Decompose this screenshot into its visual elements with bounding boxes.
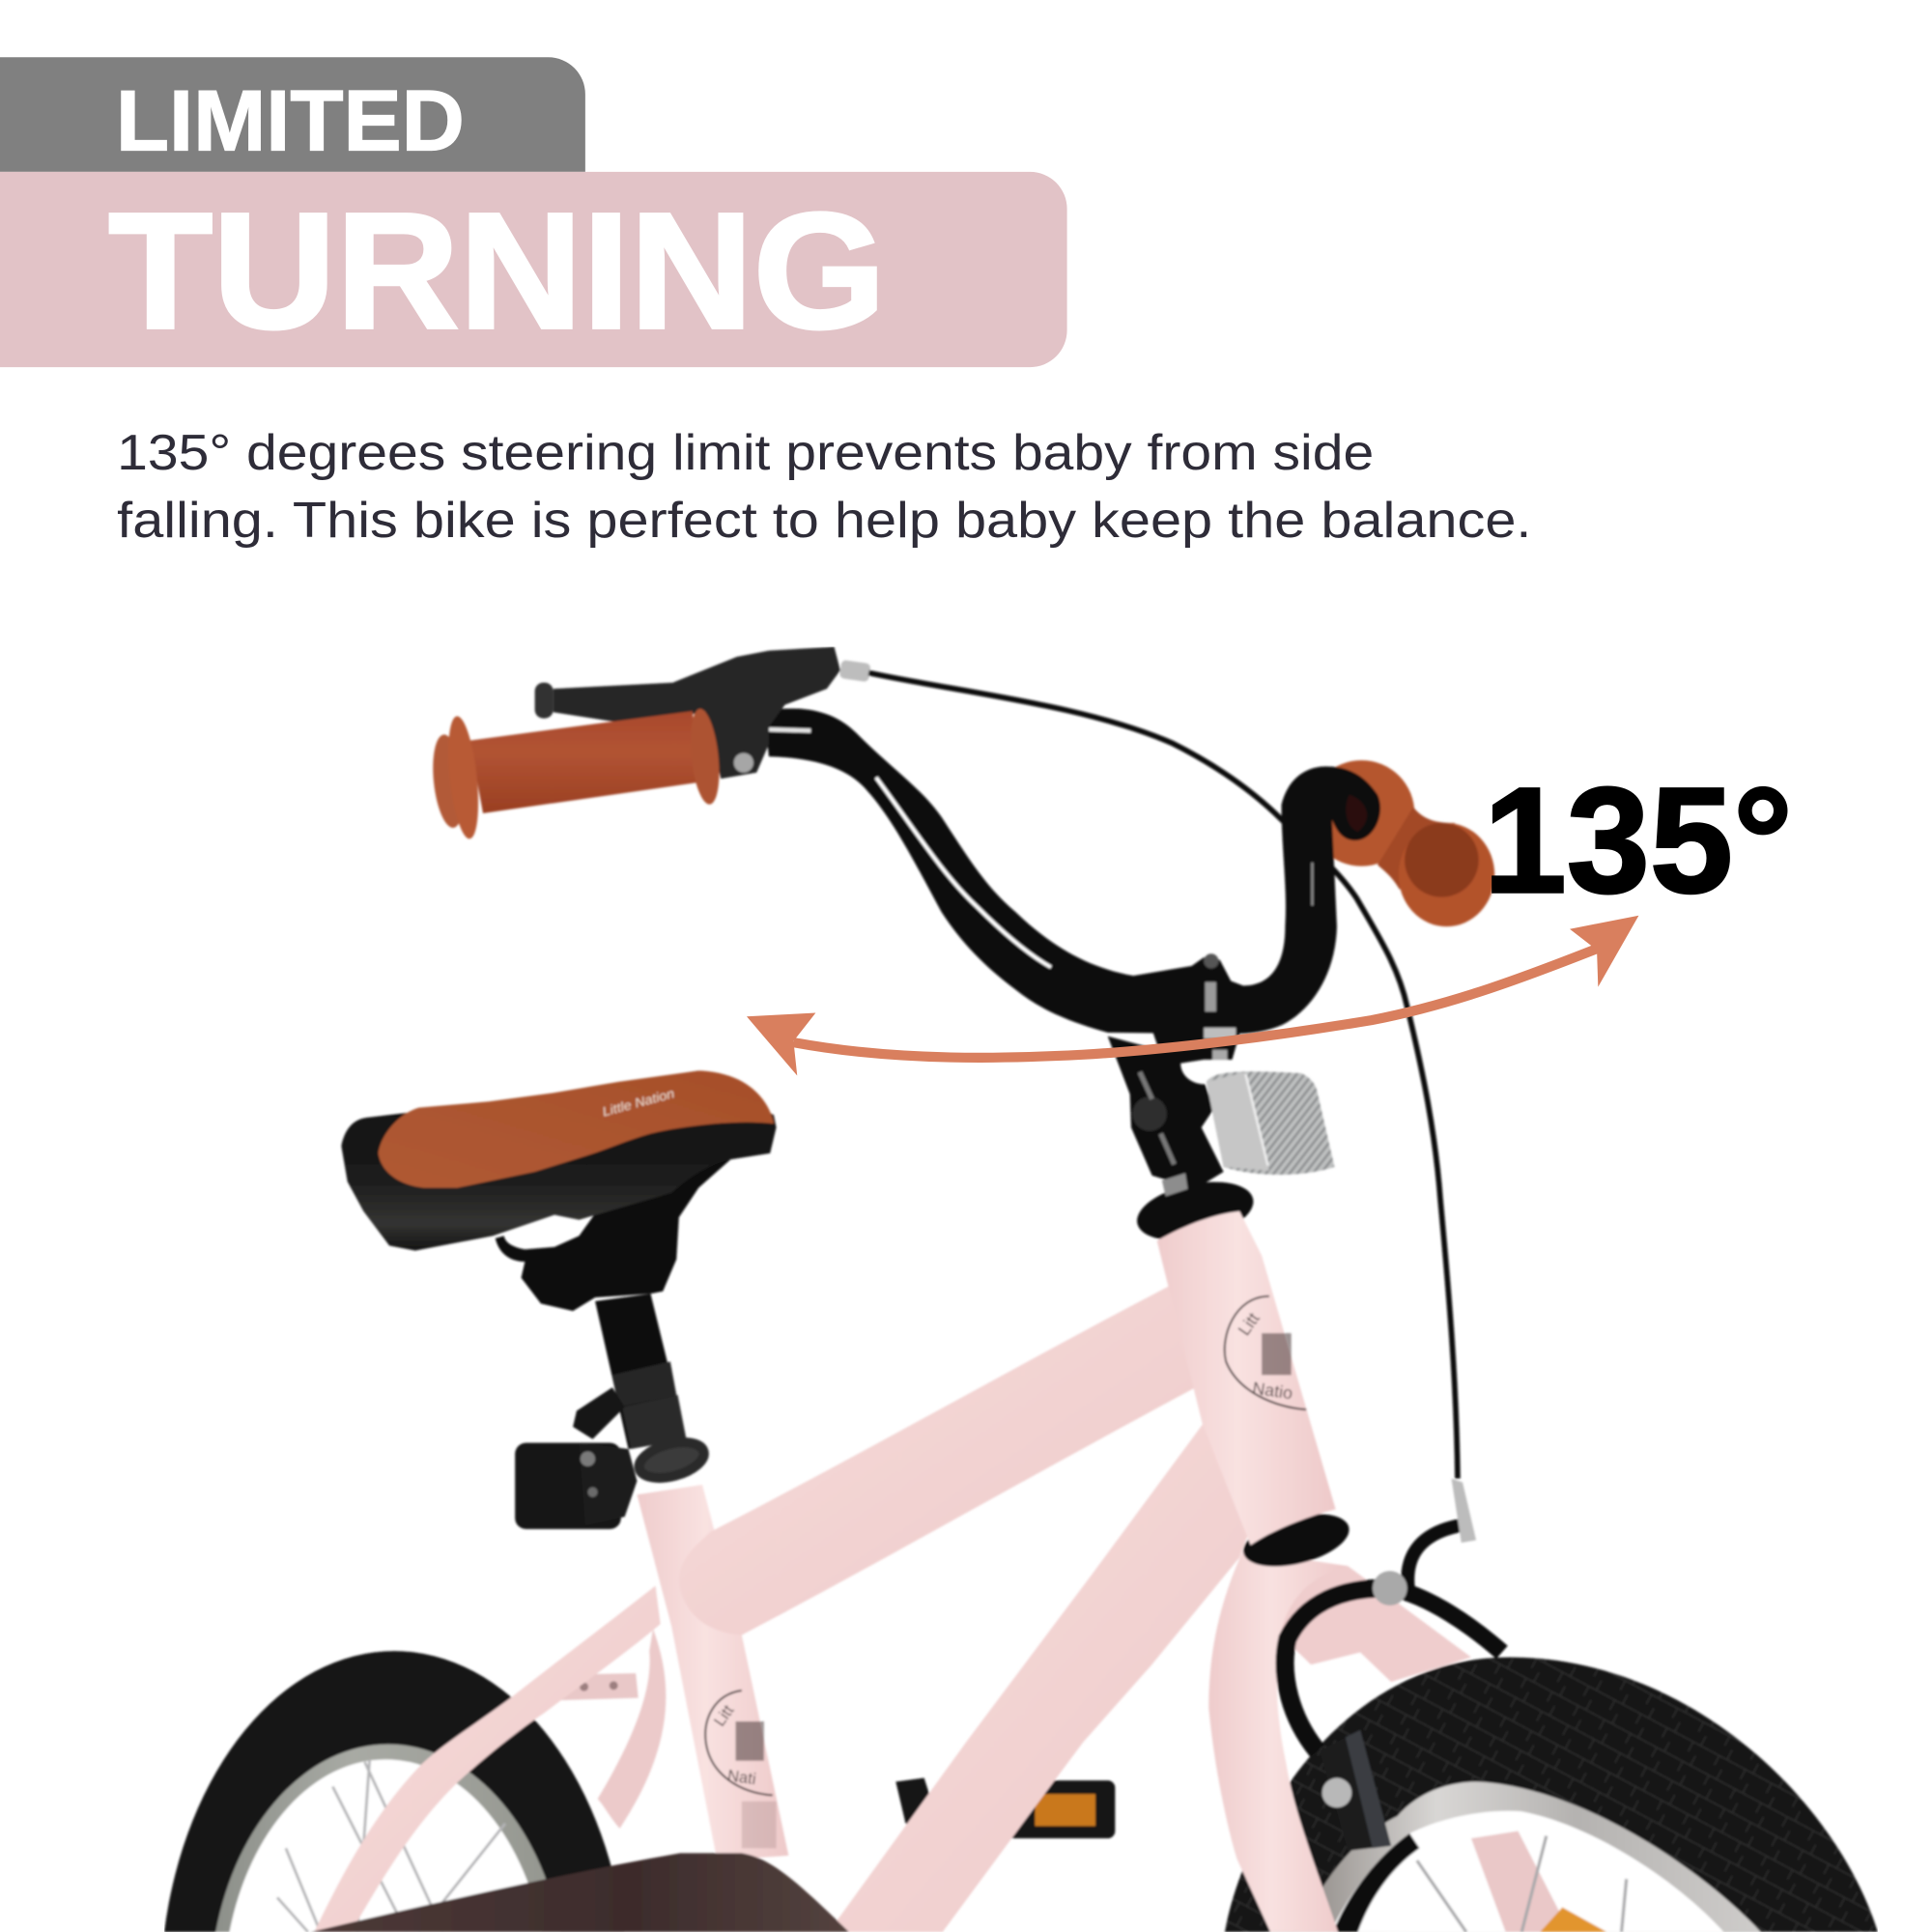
seat stay tube bbox=[314, 1586, 661, 1932]
seat tube bbox=[637, 1485, 788, 1861]
angle label: 135° bbox=[1484, 755, 1793, 923]
heading tab: limited: LIMITED bbox=[116, 72, 465, 169]
seat clamp bbox=[496, 1159, 730, 1311]
saddle bbox=[341, 1070, 777, 1251]
seat tube logo bbox=[705, 1690, 777, 1848]
seat tube logo: Nati bbox=[726, 1766, 757, 1788]
left grip bbox=[429, 707, 724, 840]
rear reflector block bbox=[515, 1436, 708, 1529]
heading tab: turning: TURNING bbox=[108, 179, 886, 363]
heading tab: turning bbox=[0, 172, 1067, 367]
rear wheel bbox=[164, 1651, 624, 1932]
heading tab: limited bbox=[0, 57, 585, 172]
description text: falling. This bike is perfect to help baby keep the balance. bbox=[117, 493, 1531, 549]
brake lever bbox=[535, 647, 871, 779]
head tube logo: Litt bbox=[1235, 1309, 1264, 1339]
right grip bbox=[1309, 760, 1494, 926]
stem and clamp bbox=[1108, 953, 1239, 1197]
description text: 135° degrees steering limit prevents baby from side bbox=[117, 425, 1374, 481]
lower headset ring bbox=[1238, 1504, 1354, 1576]
bicycle photo illustration bbox=[164, 647, 1878, 1932]
seat tube logo: Litt bbox=[710, 1701, 738, 1730]
fork crown and right leg bbox=[1274, 1557, 1471, 1682]
description text bbox=[117, 425, 1531, 549]
seat post bbox=[573, 1293, 686, 1449]
pedal bbox=[895, 1778, 1115, 1838]
head tube bbox=[1157, 1211, 1336, 1545]
down tube bbox=[828, 1424, 1269, 1932]
head tube logo: Natio bbox=[1251, 1378, 1293, 1403]
handlebar bbox=[764, 708, 1380, 1034]
saddle: Little Nation bbox=[601, 1086, 676, 1120]
left fork leg bbox=[1208, 1550, 1348, 1932]
brake cable bbox=[868, 672, 1458, 1479]
rear stay and bracket bbox=[554, 1629, 666, 1829]
upper headset ring bbox=[1132, 1173, 1259, 1250]
chain guard bbox=[310, 1853, 849, 1932]
head tube logo bbox=[1225, 1296, 1306, 1409]
top tube bbox=[679, 1279, 1205, 1635]
front reflector bbox=[1207, 1071, 1334, 1175]
steering angle arrow bbox=[747, 916, 1638, 1076]
front wheel tire bbox=[1225, 1658, 1878, 1932]
brake caliper bbox=[1285, 1479, 1502, 1851]
